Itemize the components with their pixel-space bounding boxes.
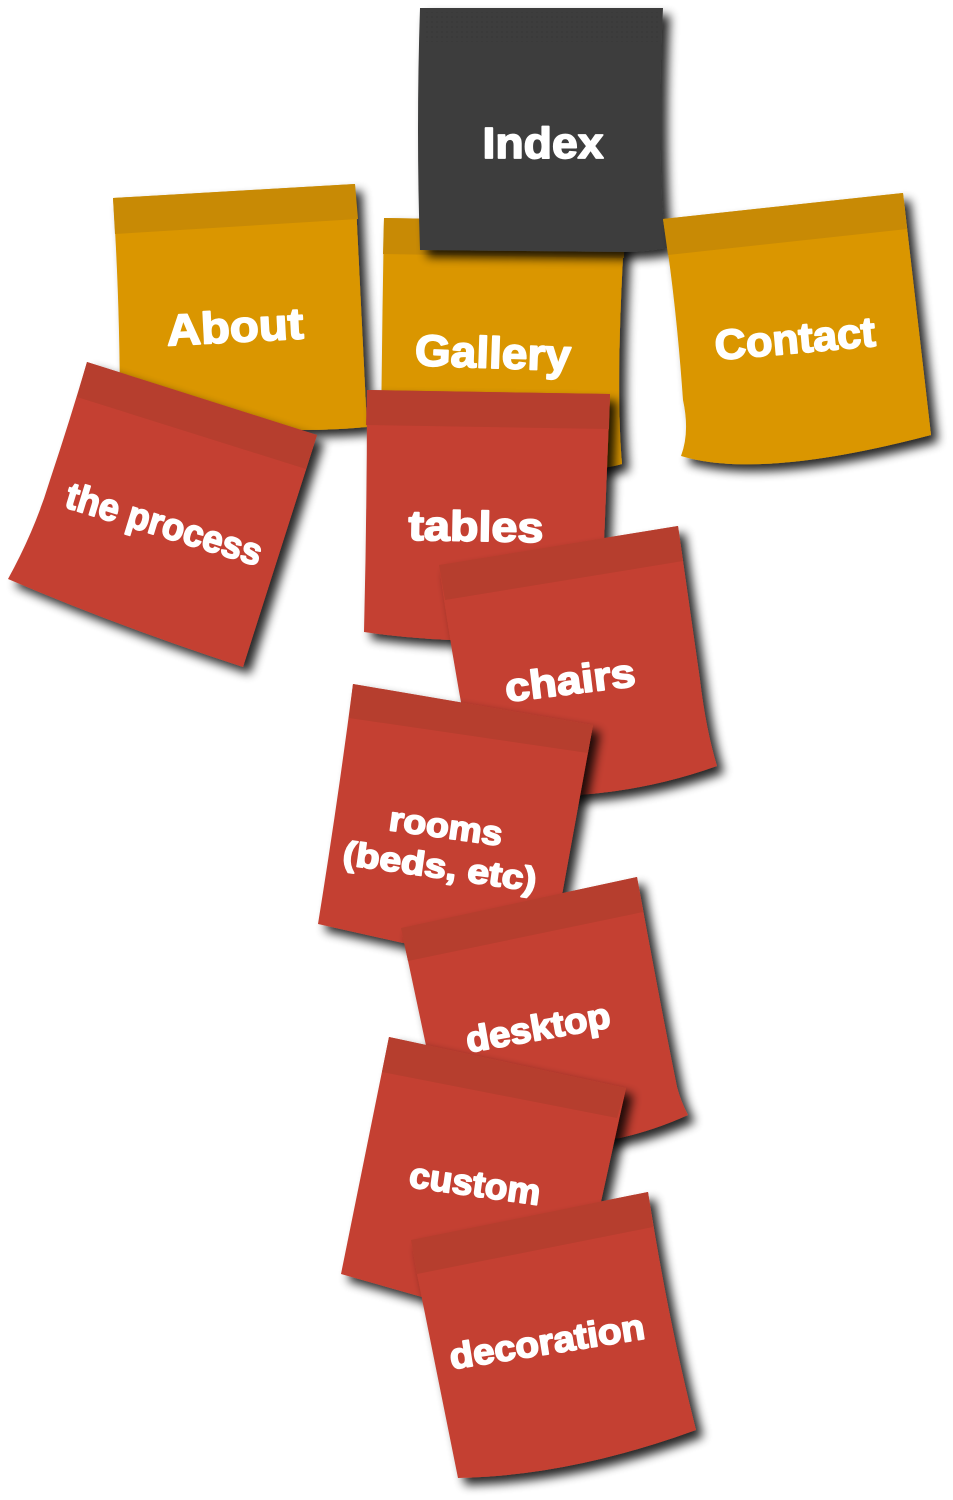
label: About: About bbox=[165, 299, 305, 356]
note: desktop bbox=[401, 877, 688, 1160]
label: Contact: Contact bbox=[713, 308, 877, 369]
label: (beds, etc): (beds, etc) bbox=[341, 835, 539, 899]
note: rooms (beds, etc) bbox=[318, 684, 593, 950]
label: custom: custom bbox=[407, 1154, 543, 1213]
note: decoration bbox=[411, 1192, 696, 1478]
note: custom bbox=[341, 1037, 626, 1320]
label: decoration: decoration bbox=[446, 1306, 647, 1377]
note: Contact bbox=[663, 193, 931, 464]
note: chairs bbox=[439, 526, 717, 800]
label: chairs: chairs bbox=[502, 651, 638, 711]
label: desktop: desktop bbox=[462, 995, 613, 1060]
note: About bbox=[113, 184, 367, 430]
note: the process bbox=[8, 362, 317, 667]
label: Index: Index bbox=[482, 119, 604, 168]
label: Gallery: Gallery bbox=[414, 326, 572, 381]
label: the process: the process bbox=[61, 475, 267, 575]
note: Gallery bbox=[381, 218, 625, 468]
label: tables: tables bbox=[408, 502, 544, 551]
note: tables bbox=[364, 390, 610, 642]
note: Index bbox=[418, 8, 667, 252]
label: rooms: rooms bbox=[387, 800, 505, 854]
